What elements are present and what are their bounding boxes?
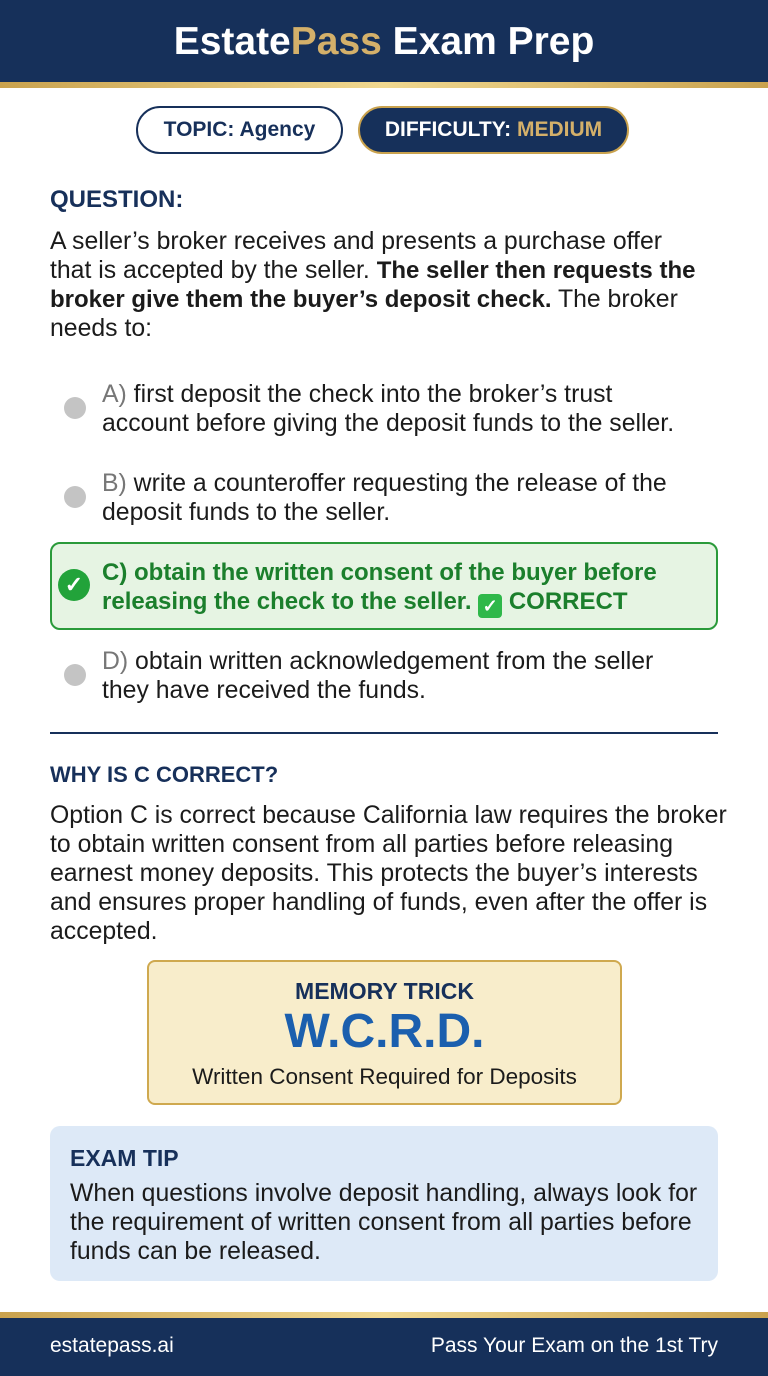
option D xyxy=(64,648,653,704)
memory trick box: Written Consent Required for Deposits xyxy=(192,1064,577,1089)
footer: Pass Your Exam on the 1st Try xyxy=(431,1334,718,1357)
option C correct: C) obtain the written consent of the buyer before xyxy=(102,559,657,586)
explanation text: earnest money deposits. This protects the buyer’s interests xyxy=(50,860,698,887)
explanation text xyxy=(50,802,727,945)
question text: needs to: xyxy=(50,315,152,342)
explanation text: to obtain written consent from all parties before releasing xyxy=(50,831,673,858)
icon: check circle: ✓ xyxy=(65,572,83,597)
pill: difficulty xyxy=(358,106,629,154)
option B: deposit funds to the seller. xyxy=(102,499,390,526)
memory trick box: W.C.R.D. xyxy=(284,1005,484,1058)
explanation text: accepted. xyxy=(50,918,158,945)
option D: D) obtain written acknowledgement from the seller xyxy=(102,648,653,675)
question text xyxy=(50,228,695,342)
option C correct xyxy=(50,542,718,630)
title: EstatePass Exam Prep xyxy=(174,20,594,63)
question text: A seller’s broker receives and presents a purchase offer xyxy=(50,228,662,255)
option A: account before giving the deposit funds to the seller. xyxy=(102,410,674,437)
exam tip box: When questions involve deposit handling, always look for xyxy=(70,1180,697,1207)
icon: check circle xyxy=(58,569,90,601)
pill: topic xyxy=(136,106,343,154)
option A xyxy=(64,381,674,437)
memory trick box: MEMORY TRICK xyxy=(295,978,474,1004)
pill: difficulty: DIFFICULTY: MEDIUM xyxy=(385,118,602,141)
option D: they have received the funds. xyxy=(102,677,426,704)
why heading: WHY IS C CORRECT? xyxy=(50,762,278,787)
footer: estatepass.ai xyxy=(50,1334,174,1357)
exam tip box: EXAM TIP xyxy=(70,1145,179,1171)
explanation text: and ensures proper handling of funds, even after the offer is xyxy=(50,889,707,916)
option C correct: releasing the check to the seller. CORRECT xyxy=(102,588,628,615)
explanation text: Option C is correct because California law requires the broker xyxy=(50,802,727,829)
exam tip box: the requirement of written consent from all parties before xyxy=(70,1209,692,1236)
option C correct: ✓ xyxy=(483,596,498,616)
question text: that is accepted by the seller. The seller then requests the xyxy=(50,257,695,284)
option A: A) first deposit the check into the broker’s trust xyxy=(102,381,612,408)
exam tip box: funds can be released. xyxy=(70,1238,321,1265)
footer xyxy=(0,1312,768,1376)
memory trick box xyxy=(147,960,622,1105)
option B xyxy=(64,470,667,526)
question heading: QUESTION: xyxy=(50,186,183,213)
question text: broker give them the buyer’s deposit check. The broker xyxy=(50,286,678,313)
header xyxy=(0,0,768,82)
pill: topic: TOPIC: Agency xyxy=(164,118,315,141)
option B: B) write a counteroffer requesting the release of the xyxy=(102,470,667,497)
exam tip box xyxy=(50,1126,718,1281)
